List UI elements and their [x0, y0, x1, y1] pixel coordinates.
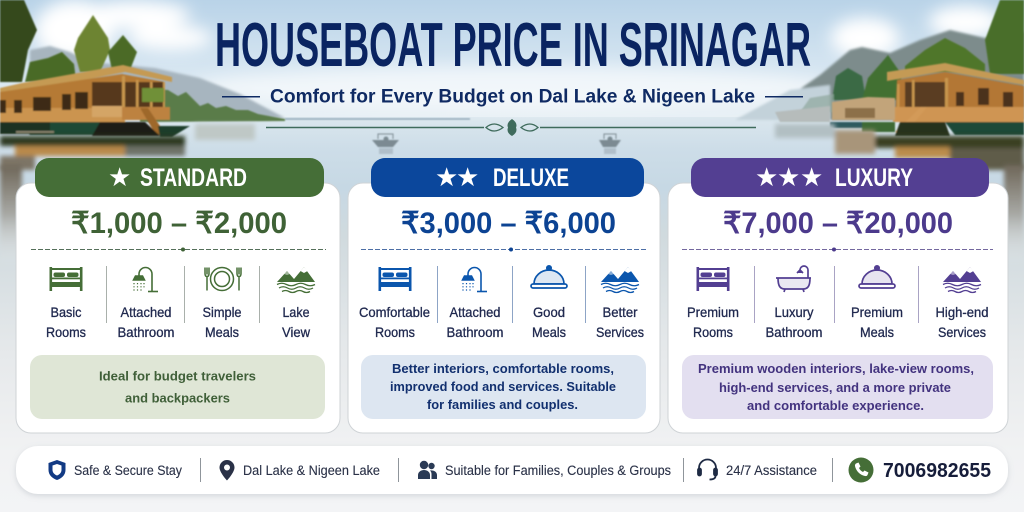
deluxe features: Comfortable — [359, 304, 430, 320]
deluxe header: ★ — [435, 162, 458, 192]
icon: location pin — [220, 460, 234, 480]
footer bar — [16, 446, 1008, 494]
deluxe price: ₹3,000 – ₹6,000 — [401, 207, 616, 240]
sky — [0, 0, 1024, 120]
ornament divider — [266, 119, 756, 136]
phone number: 7006982655 — [883, 460, 991, 482]
luxury features: Bathroom — [766, 324, 822, 340]
luxury header: ★ — [800, 162, 823, 192]
far shore — [285, 118, 470, 120]
standard note: Ideal for budget travelers — [99, 368, 256, 384]
small houseboats — [775, 97, 895, 132]
panel: luxury — [668, 158, 1008, 433]
lake water — [0, 117, 1024, 512]
panel: deluxe — [348, 158, 660, 433]
deluxe header — [371, 158, 644, 197]
luxury features: Premium — [851, 304, 903, 320]
luxury header: ★ — [777, 162, 800, 192]
standard features: Basic — [50, 304, 82, 320]
luxury features: Services — [938, 324, 986, 340]
standard features: Simple — [202, 304, 242, 320]
icon: phone — [848, 458, 874, 482]
right mountains — [735, 30, 1024, 120]
deluxe note — [361, 355, 646, 419]
standard features: Rooms — [46, 324, 86, 340]
luxury features — [687, 266, 988, 340]
deluxe note: improved food and services. Suitable — [390, 379, 616, 394]
standard header: STANDARD — [140, 164, 247, 192]
panel: standard — [16, 158, 340, 433]
deluxe features: Meals — [532, 324, 566, 340]
luxury price: ₹7,000 – ₹20,000 — [723, 207, 953, 240]
icon: people — [418, 461, 437, 479]
deluxe features — [359, 266, 644, 340]
assistance text: 24/7 Assistance — [726, 463, 817, 478]
luxury note — [682, 355, 993, 419]
standard features: Meals — [205, 324, 239, 340]
small boat right — [599, 134, 621, 154]
standard header: ★ — [108, 162, 131, 192]
safe stay text: Safe & Secure Stay — [74, 463, 182, 478]
left hills — [30, 46, 285, 118]
luxury features: High-end — [936, 304, 988, 320]
deluxe features: Good — [533, 304, 565, 320]
luxury header — [691, 158, 989, 197]
standard features: Bathroom — [118, 324, 174, 340]
right houseboat — [887, 63, 1024, 136]
luxury features: Luxury — [774, 304, 814, 320]
small boat left — [372, 134, 399, 154]
standard features — [46, 266, 315, 340]
luxury note: and comfortable experience. — [747, 398, 924, 413]
standard features: View — [282, 324, 311, 340]
right trees — [800, 0, 1024, 112]
luxury features: Rooms — [693, 324, 733, 340]
deluxe note: for families and couples. — [427, 397, 578, 412]
deluxe header: ★ — [456, 162, 479, 192]
standard header — [35, 158, 324, 197]
left houseboat — [0, 65, 190, 137]
left tree line — [140, 89, 285, 122]
deluxe features: Attached — [450, 304, 500, 320]
luxury features: Meals — [860, 324, 894, 340]
standard features: Attached — [120, 304, 172, 320]
deluxe features: Bathroom — [446, 324, 504, 340]
deluxe note: Better interiors, comfortable rooms, — [392, 361, 614, 376]
standard features: Lake — [282, 304, 310, 320]
left trees — [0, 0, 137, 82]
left reflection — [0, 124, 255, 170]
standard note — [30, 355, 325, 419]
luxury features: Premium — [687, 304, 739, 320]
luxury header: ★ — [755, 162, 778, 192]
standard price: ₹1,000 – ₹2,000 — [71, 207, 287, 240]
deluxe features: Better — [602, 304, 638, 320]
icon: headset — [698, 460, 717, 480]
families text: Suitable for Families, Couples & Groups — [445, 463, 671, 478]
right reflection — [775, 124, 1024, 170]
standard note: and backpackers — [125, 390, 230, 406]
clouds — [35, 0, 1001, 110]
icon: shield — [48, 460, 66, 480]
subtitle: Comfort for Every Budget on Dal Lake & Nigeen Lake — [270, 86, 755, 108]
luxury note: Premium wooden interiors, lake-view rooms, — [698, 361, 974, 376]
location text: Dal Lake & Nigeen Lake — [243, 463, 380, 478]
luxury note: high-end services, and a more private — [719, 380, 951, 395]
luxury header: LUXURY — [835, 164, 913, 192]
deluxe features: Rooms — [375, 324, 415, 340]
side fades behind cards — [0, 165, 1024, 265]
deluxe features: Services — [596, 324, 644, 340]
deluxe header: DELUXE — [493, 164, 569, 192]
